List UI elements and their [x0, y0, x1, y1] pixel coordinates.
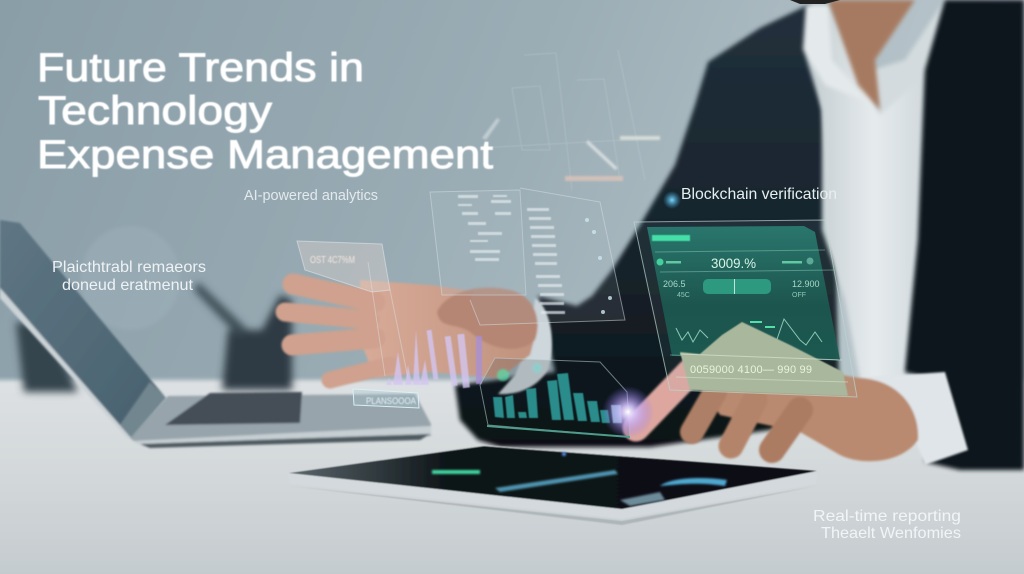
label: left garbled text: [52, 259, 206, 294]
tablet screen details: [432, 452, 727, 506]
left palm: [360, 280, 538, 378]
right fingers: [636, 372, 800, 450]
hologram: green dashboard panel: 206.5: [663, 279, 686, 289]
hologram: small label tag: PLANSOOOA: [366, 396, 416, 406]
hologram: small label tag: [353, 389, 419, 408]
label: left garbled text: Plaicthtrabl remaeors: [52, 259, 206, 276]
label: Real-time reporting: [813, 508, 961, 542]
label: left garbled text: doneud eratmenut: [62, 277, 194, 294]
hand seen through panel: [680, 322, 848, 396]
hologram: green dashboard panel: 45C: [677, 292, 690, 299]
tablet: [287, 445, 818, 525]
title: [37, 46, 493, 177]
hologram: teal bar chart: [480, 358, 630, 438]
collar: [803, 5, 880, 115]
panel figures: 3009.%: [711, 255, 756, 271]
right shirt cuff: [860, 372, 968, 465]
jacket sleeve and torso: [455, 4, 840, 447]
back of hand: [690, 365, 918, 461]
right jacket front: [905, 0, 1024, 470]
hologram: green dashboard panel: 12.900: [792, 279, 820, 289]
hologram: background wireframes: [480, 50, 660, 190]
hologram: green dashboard panel: 0059000 4100— 990 99: [690, 364, 812, 376]
title: Technology: [38, 89, 272, 133]
hologram accent bars: [482, 118, 660, 181]
table surface: [0, 380, 1024, 574]
label: AI-powered analytics: AI-powered analytics: [244, 188, 378, 204]
beard shadow: [790, 0, 840, 4]
hologram: data table panel: [430, 188, 625, 325]
laptop: [0, 220, 431, 448]
hologram: green dashboard panel: OFF: [792, 292, 806, 299]
label: Blockchain verification: Blockchain verification: [681, 186, 837, 203]
label: Real-time reporting: Real-time reporting: [813, 508, 961, 525]
table rows: [458, 195, 565, 314]
laptop base: [130, 392, 431, 448]
left hand: [285, 280, 552, 394]
title: Expense Management: [37, 133, 493, 177]
left thumb: [437, 288, 538, 349]
left shirt cuff: [498, 298, 552, 394]
green panel bar: [652, 235, 690, 241]
person: jacket and shirt: [455, 0, 1024, 470]
title: Future Trends in: [37, 46, 364, 90]
faint circle behind left label: [80, 226, 180, 330]
label: Real-time reporting: Theaelt Wenfomies: [821, 525, 961, 542]
right hand: [636, 365, 968, 465]
hologram: small card over fingers: OST 4C7%M: [310, 255, 355, 266]
sparkles: [585, 218, 612, 314]
pill indicators: [656, 258, 664, 266]
hologram: small card over fingers: [297, 241, 408, 378]
blurred desk objects: [16, 282, 292, 392]
sparklines: [676, 328, 708, 342]
left fingers: [285, 284, 390, 380]
shirt: [803, 0, 945, 380]
neck skin: [828, 0, 915, 110]
glow at fingertip: [602, 386, 654, 438]
hologram: green dashboard panel: [634, 220, 857, 397]
hologram: violet bar chart: [386, 330, 482, 388]
laptop screen: [0, 220, 166, 438]
cyan spark near Blockchain label: [663, 191, 681, 209]
background wall: [0, 0, 1024, 385]
